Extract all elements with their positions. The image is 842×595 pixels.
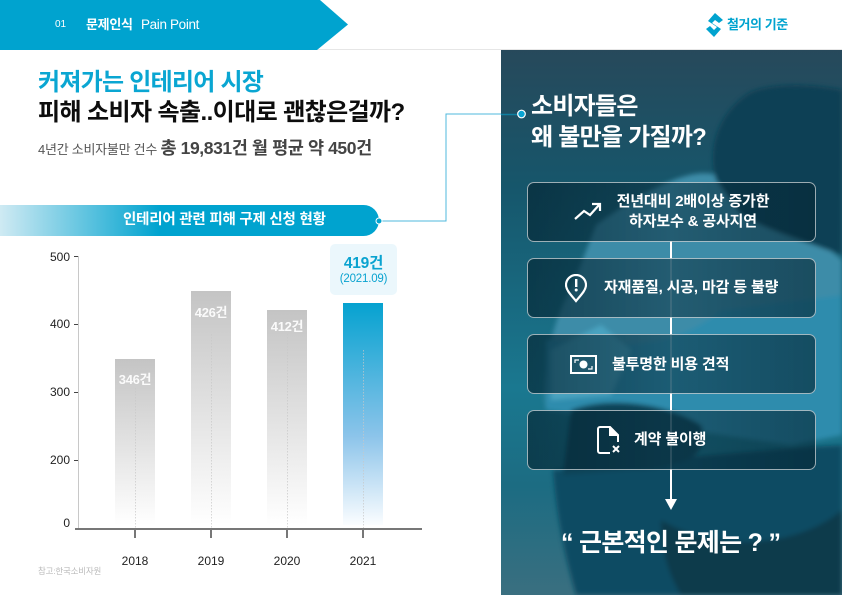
bar value labels: 346건 bbox=[119, 372, 151, 387]
y axis labels: 200 bbox=[50, 453, 70, 467]
cause text: 전년대비 2배이상 증가한 bbox=[617, 193, 769, 210]
panel heading: 왜 불만을 가질까? bbox=[531, 124, 706, 151]
panel heading: 소비자들은 bbox=[531, 93, 638, 120]
x axis labels: 2021 bbox=[350, 554, 376, 568]
header banner bbox=[0, 0, 348, 50]
photo: shirt bbox=[545, 173, 842, 445]
cause text: 불투명한 비용 견적 bbox=[612, 356, 729, 373]
connector end dot bbox=[501, 110, 526, 118]
callout 419 bbox=[330, 244, 397, 295]
callout 419: 419건 bbox=[344, 255, 383, 272]
panel heading bbox=[531, 93, 706, 151]
header banner: 문제인식 bbox=[86, 17, 133, 32]
title bbox=[38, 69, 405, 126]
title: 피해 소비자 속출..이대로 괜찮은걸까? bbox=[38, 99, 405, 126]
x axis labels: 2018 bbox=[122, 554, 148, 568]
y axis labels: 500 bbox=[50, 250, 70, 264]
callout 419: (2021.09) bbox=[340, 273, 387, 285]
cause text: 계약 불이행 bbox=[634, 431, 706, 448]
connector line bbox=[376, 114, 501, 224]
icon: file with x bbox=[597, 426, 620, 454]
icon: alert pin bbox=[565, 274, 587, 303]
header banner: 01 bbox=[55, 19, 66, 30]
photo: legs bbox=[553, 445, 842, 595]
cause text: 하자보수 & 공사지연 bbox=[629, 213, 757, 230]
bar value labels: 426건 bbox=[195, 305, 227, 320]
cause box 3 bbox=[527, 334, 816, 394]
x axis labels: 2020 bbox=[274, 554, 300, 568]
y axis labels bbox=[50, 250, 70, 530]
bar chart bbox=[74, 244, 422, 538]
arrow head bbox=[665, 499, 677, 510]
source note: 참고:한국소비자원 bbox=[38, 566, 101, 576]
cause text bbox=[617, 193, 770, 230]
photo: head bbox=[713, 85, 842, 255]
cause text: 자재품질, 시공, 마감 등 불량 bbox=[604, 279, 778, 296]
cause box 2 bbox=[527, 258, 816, 318]
connector segments bbox=[670, 241, 672, 503]
cause box 4 bbox=[527, 410, 816, 470]
y axis labels: 400 bbox=[50, 317, 70, 331]
title: 커져가는 인테리어 시장 bbox=[38, 69, 263, 96]
x axis labels: 2019 bbox=[198, 554, 224, 568]
background photo approximation bbox=[501, 50, 842, 595]
chart title pill bbox=[0, 205, 379, 236]
y axis labels: 0 bbox=[63, 516, 70, 530]
cause box 1 bbox=[527, 182, 816, 242]
logo: 철거의 기준 bbox=[727, 17, 788, 32]
bar value labels bbox=[119, 305, 303, 387]
logo bbox=[706, 13, 788, 37]
panel: why consumers are unhappy bbox=[501, 50, 842, 595]
header rule bbox=[0, 49, 842, 50]
icon: trend up bbox=[574, 202, 602, 220]
header banner: Pain Point bbox=[141, 17, 199, 32]
y axis labels: 300 bbox=[50, 385, 70, 399]
x axis labels bbox=[122, 554, 376, 568]
chart title pill: 인테리어 관련 피해 구제 신청 현황 bbox=[123, 212, 326, 228]
subtitle: 4년간 소비자불만 건수 총 19,831건 월 평균 약 450건 bbox=[38, 138, 372, 158]
conclusion: “ 근본적인 문제는 ? ” bbox=[561, 529, 780, 557]
icon: banknote bbox=[570, 355, 597, 374]
bar value labels: 412건 bbox=[271, 319, 303, 334]
